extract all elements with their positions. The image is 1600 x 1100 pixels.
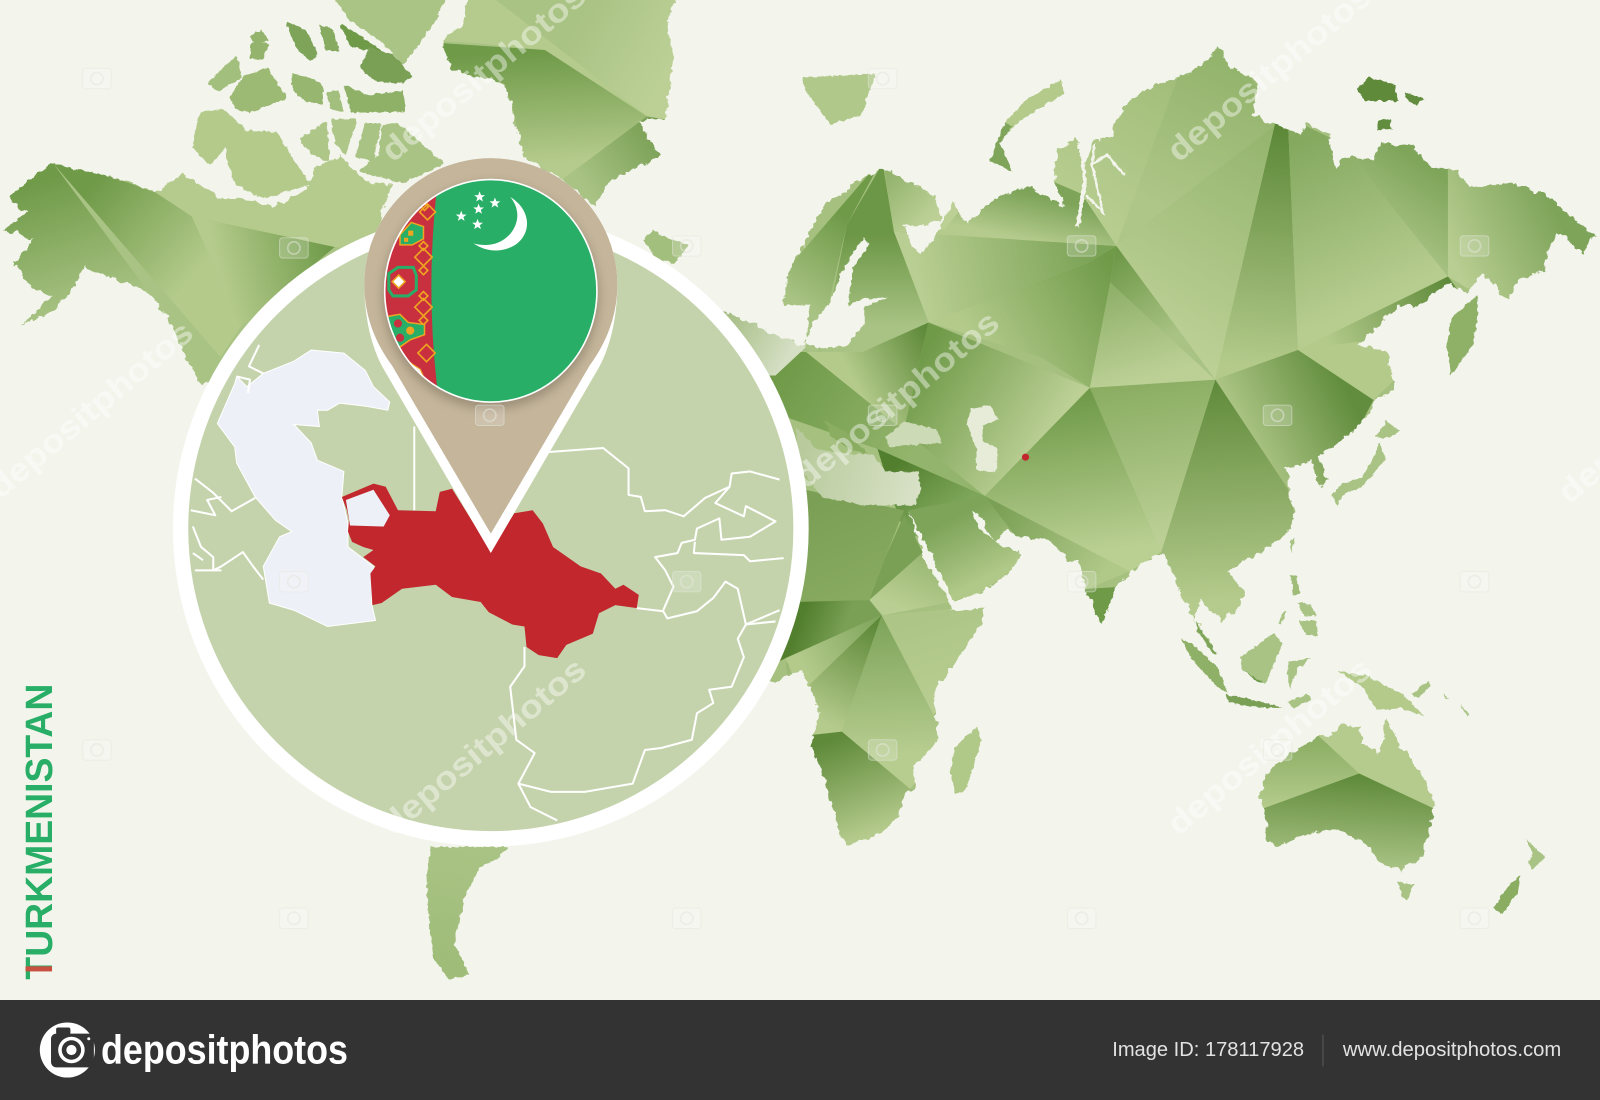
flag: carpet band (386, 196, 437, 386)
flag: crescent (473, 197, 527, 251)
magnifier ring (181, 218, 801, 839)
location pin with flag (364, 158, 617, 553)
stock watermarks (0, 0, 1600, 842)
flag: five stars (456, 191, 500, 229)
landmass: Southeast Asian islands (1181, 574, 1469, 716)
landmass: Iceland (643, 230, 689, 263)
stock watermarks: depositphotos (787, 303, 1006, 495)
landmass: Madagascar (950, 727, 982, 794)
footer: camera logo (40, 1022, 95, 1078)
footer: website: www.depositphotos.com (1342, 1039, 1561, 1061)
landmass: Australia (1258, 718, 1436, 873)
Turkmenistan highlighted in red (342, 484, 639, 658)
inland waters: Baltic, Ob gulf, seas (796, 141, 1124, 505)
vertical title: TURKMENISTAN (18, 684, 60, 980)
neighbouring country borders (191, 345, 784, 820)
stock watermarks: depositphotos (1159, 0, 1378, 169)
landmass: Japan and Taiwan (1290, 421, 1400, 553)
landmass: North America (4, 154, 394, 386)
landmass: Greenland (439, 0, 684, 214)
pin body (364, 158, 617, 553)
title: flag carpet accent (26, 966, 52, 971)
footer: wordmark: depositphotos (101, 1026, 348, 1072)
footer: image id: Image ID: 178117928 (1112, 1039, 1304, 1061)
landmass: Tasmania and New Zealand (1397, 839, 1545, 914)
magnifier circle map (181, 218, 801, 839)
landmass: South America (427, 847, 507, 980)
stock watermarks: depositphotos (1159, 650, 1378, 842)
landmass: Eurasia and Africa polygonal facets (714, 20, 1600, 857)
flag of Turkmenistan (384, 178, 598, 403)
stock watermarks: depositphotos (374, 650, 593, 842)
landmass: Canadian Arctic islands (194, 0, 444, 197)
footer bar (0, 1000, 1600, 1100)
Caspian Sea (217, 350, 390, 627)
stock watermarks: depositphotos (374, 0, 593, 169)
landmass: northern Asian islands (803, 73, 1478, 376)
marker: Turkmenistan location dot (1022, 454, 1029, 461)
watermark camera icons (83, 68, 1489, 929)
